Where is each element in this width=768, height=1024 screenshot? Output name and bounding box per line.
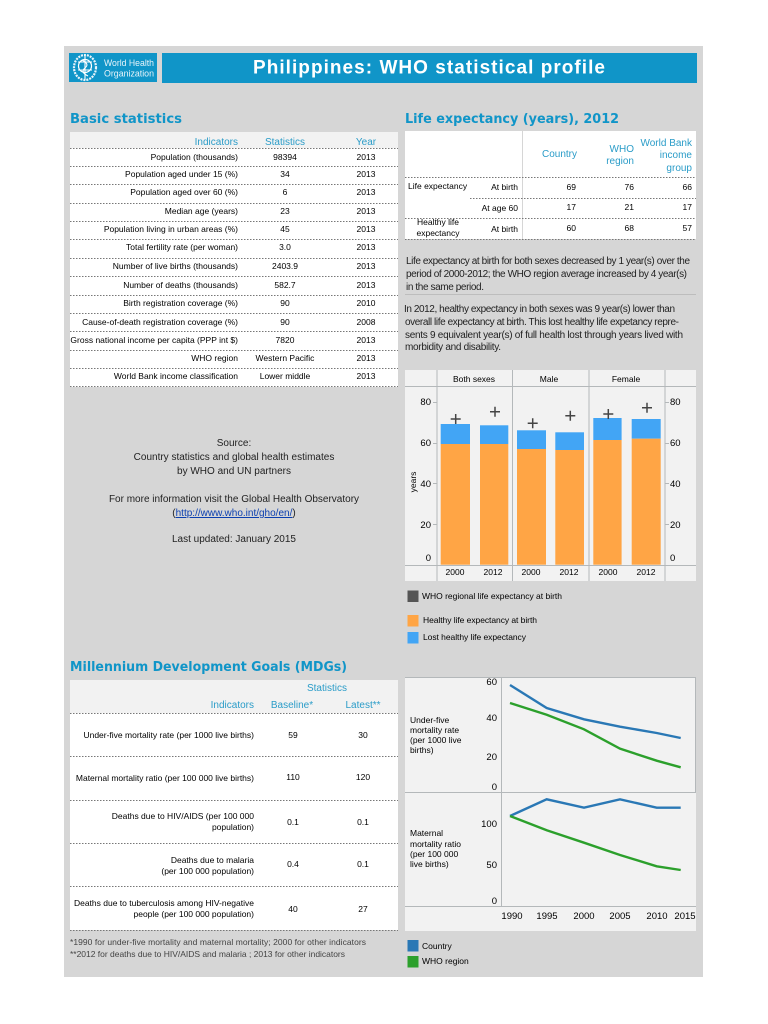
- bar chart: life expectancy: 2012: [560, 567, 579, 577]
- table: MDGs: Baseline*: [271, 700, 313, 711]
- table: MDGs: (per 100 000 population): [161, 866, 254, 876]
- bar chart: life expectancy: 60: [420, 438, 431, 449]
- line charts: mortality trends: 1990: [501, 911, 523, 922]
- bar chart: life expectancy: 2012: [637, 567, 656, 577]
- table: MDGs: Deaths due to malaria: [171, 855, 254, 865]
- table: life expectancy: 21: [625, 202, 634, 212]
- table: basic statistics: 582.7: [274, 280, 296, 290]
- chart: under-five mortality: 40: [486, 713, 497, 724]
- table: life expectancy: 66: [683, 182, 692, 192]
- table: life expectancy: income: [660, 150, 692, 161]
- bar chart: life expectancy: 80: [670, 397, 681, 408]
- table: basic statistics: 2013: [357, 353, 376, 363]
- table: life expectancy: 60: [567, 223, 576, 233]
- source note: by WHO and UN partners: [177, 466, 291, 477]
- title banner: [162, 53, 697, 83]
- table: MDGs: [70, 680, 398, 930]
- legend: line charts: WHO region: [422, 956, 469, 966]
- table: basic statistics: Population aged over 60 (%): [130, 187, 238, 197]
- bar chart: life expectancy: 60: [670, 438, 681, 449]
- line charts: mortality trends: [405, 677, 696, 931]
- table: MDGs: Under-five mortality rate (per 1000 live births): [83, 730, 254, 740]
- source note: Last updated: January 2015: [172, 534, 296, 545]
- bar chart: life expectancy: 80: [420, 397, 431, 408]
- table: basic statistics: Population living in urban areas (%): [104, 224, 238, 234]
- table: basic statistics: World Bank income classification: [114, 371, 238, 381]
- table: life expectancy: At age 60: [482, 203, 518, 213]
- line charts: mortality trends: 2015: [674, 911, 696, 922]
- chart: under-five mortality: 0: [492, 782, 497, 793]
- text: healthy expectancy: In 2012, healthy expectancy in both sexes was 9 year(s) lower than: [404, 304, 675, 315]
- chart: under-five mortality: 60: [486, 677, 497, 688]
- table: MDGs: Indicators: [211, 700, 254, 711]
- text: healthy expectancy: overall life expectancy at birth. This lost healthy life expetancy repre-: [405, 317, 679, 328]
- table: basic statistics: 2010: [357, 298, 376, 308]
- line charts: mortality trends: 2005: [609, 911, 631, 922]
- table: basic statistics: Cause-of-death registration coverage (%): [82, 317, 238, 327]
- table: basic statistics: 90: [280, 317, 290, 327]
- bar chart: life expectancy: [405, 370, 696, 581]
- text: healthy expectancy: morbidity and disability.: [405, 342, 501, 353]
- table: life expectancy: 17: [567, 202, 576, 212]
- line charts: mortality trends: 1995: [536, 911, 558, 922]
- text: healthy expectancy: sents 9 equivalent year(s) of full health lost through years lived with: [405, 330, 683, 341]
- source note: (http://www.who.int/gho/en/): [172, 508, 296, 519]
- bar chart: life expectancy: 20: [420, 520, 431, 531]
- table: MDGs: 40: [288, 904, 298, 914]
- chart: under-five mortality: mortality rate: [410, 725, 459, 735]
- table: basic statistics: 3.0: [279, 242, 291, 252]
- table: life expectancy: 76: [625, 182, 634, 192]
- table: life expectancy: At birth: [491, 182, 518, 192]
- table: basic statistics: 2013: [357, 224, 376, 234]
- table: basic statistics: Birth registration coverage (%): [123, 298, 238, 308]
- source note: [109, 438, 359, 545]
- heading: basic statistics: Basic statistics: [70, 111, 182, 127]
- table: basic statistics: 2013: [357, 152, 376, 162]
- table: life expectancy: group: [666, 163, 692, 174]
- table: life expectancy: 57: [683, 223, 692, 233]
- table: life expectancy: expectancy: [416, 228, 460, 238]
- table: basic statistics: 7820: [276, 335, 295, 345]
- table: basic statistics: 90: [280, 298, 290, 308]
- text: life expectancy trend: period of 2000-2012; the WHO region average increased by 4 year(s): [406, 269, 687, 280]
- table: life expectancy: 17: [683, 202, 692, 212]
- WHO logo: Organization: [104, 68, 154, 80]
- chart: under-five mortality: births): [410, 745, 434, 755]
- bar chart: life expectancy: 20: [670, 520, 681, 531]
- table: basic statistics: Median age (years): [165, 206, 238, 216]
- legend: bar chart: Lost healthy life expectancy: [423, 632, 527, 642]
- legend: bar chart: WHO regional life expectancy at birth: [422, 591, 562, 601]
- table: life expectancy: World Bank: [640, 138, 693, 149]
- table: MDGs: 0.1: [287, 817, 299, 827]
- text: healthy expectancy: [404, 304, 683, 353]
- chart: under-five mortality: Under-five: [410, 715, 449, 725]
- table: basic statistics: [70, 132, 398, 387]
- table: MDGs: Maternal mortality ratio (per 100 000 live births): [76, 773, 254, 783]
- table: MDGs: 0.1: [357, 859, 369, 869]
- chart: maternal mortality: [410, 799, 681, 907]
- table: MDGs: Statistics: [307, 683, 347, 694]
- legend: line charts: Country: [422, 941, 453, 951]
- bar chart: life expectancy: 2012: [484, 567, 503, 577]
- table: basic statistics: 98394: [273, 152, 297, 162]
- bar chart: life expectancy: 2000: [446, 567, 465, 577]
- table: basic statistics: WHO region: [191, 353, 238, 363]
- table: MDGs: 27: [358, 904, 368, 914]
- footnotes: [70, 937, 366, 959]
- table: basic statistics: 2013: [357, 261, 376, 271]
- text: life expectancy trend: [406, 256, 690, 293]
- table: life expectancy: [405, 131, 696, 240]
- table: MDGs: people (per 100 000 population): [133, 909, 254, 919]
- chart: maternal mortality: Maternal: [410, 828, 443, 838]
- line charts: mortality trends: 2010: [646, 911, 668, 922]
- chart: under-five mortality: 20: [486, 752, 497, 763]
- bar chart: life expectancy: 0: [670, 553, 675, 564]
- table: basic statistics: Gross national income per capita (PPP int $): [70, 335, 238, 345]
- table: basic statistics: 2013: [357, 169, 376, 179]
- table: basic statistics: Population (thousands): [151, 152, 238, 162]
- table: MDGs: 0.1: [357, 817, 369, 827]
- table: MDGs: Deaths due to tuberculosis among HIV-negative: [74, 898, 254, 908]
- table: basic statistics: 2403.9: [272, 261, 298, 271]
- table: MDGs: Latest**: [345, 700, 381, 711]
- table: MDGs: 30: [358, 730, 368, 740]
- table: MDGs: Deaths due to HIV/AIDS (per 100 000: [112, 811, 254, 821]
- chart: maternal mortality: 100: [481, 819, 497, 830]
- heading: MDGs: Millennium Development Goals (MDGs): [70, 659, 347, 675]
- text: life expectancy trend: in the same period.: [406, 282, 484, 293]
- table: basic statistics: Statistics: [265, 137, 305, 148]
- legend: line charts: [408, 940, 469, 968]
- heading: life expectancy: Life expectancy (years), 2012: [405, 111, 619, 127]
- table: life expectancy: At birth: [491, 224, 518, 234]
- bar chart: life expectancy: Female: [612, 374, 640, 384]
- table: MDGs: population): [212, 822, 254, 832]
- background panel: [64, 46, 703, 977]
- table: life expectancy: Healthy life: [417, 217, 459, 227]
- source note: Source:: [217, 438, 251, 449]
- table: basic statistics: 6: [283, 187, 288, 197]
- table: life expectancy: region: [606, 156, 634, 167]
- source note: Country statistics and global health estimates: [134, 452, 334, 463]
- bar chart: life expectancy: 40: [420, 479, 431, 490]
- table: life expectancy: Country: [542, 149, 577, 160]
- chart: maternal mortality: (per 100 000: [410, 849, 458, 859]
- footnotes: *1990 for under-five mortality and maternal mortality; 2000 for other indicators: [70, 937, 366, 947]
- table: life expectancy: 68: [625, 223, 634, 233]
- table: basic statistics: 2013: [357, 280, 376, 290]
- table: basic statistics: Number of deaths (thousands): [123, 280, 238, 290]
- WHO logo: World Health: [104, 58, 154, 69]
- table: basic statistics: Population aged under 15 (%): [125, 169, 238, 179]
- table: basic statistics: Total fertility rate (per woman): [126, 242, 238, 252]
- bar chart: life expectancy: Both sexes: [453, 374, 495, 384]
- table: MDGs: 120: [356, 772, 370, 782]
- legend: bar chart: [408, 590, 562, 644]
- bar chart: life expectancy: 40: [670, 479, 681, 490]
- footnotes: **2012 for deaths due to HIV/AIDS and malaria ; 2013 for other indicators: [70, 949, 345, 959]
- line charts: mortality trends: 2000: [573, 911, 595, 922]
- bar chart: life expectancy: 2000: [599, 567, 618, 577]
- chart: under-five mortality: (per 1000 live: [410, 735, 462, 745]
- bar chart: life expectancy: years: [408, 472, 418, 492]
- table: basic statistics: 23: [280, 206, 290, 216]
- text: life expectancy trend: Life expectancy at birth for both sexes decreased by 1 year(s) over the: [406, 256, 690, 267]
- chart: maternal mortality: mortality ratio: [410, 839, 461, 849]
- table: basic statistics: 2013: [357, 206, 376, 216]
- bar chart: life expectancy: 0: [426, 553, 431, 564]
- WHO logo: [69, 53, 157, 82]
- table: basic statistics: 2013: [357, 242, 376, 252]
- table: MDGs: 110: [286, 772, 300, 782]
- table: basic statistics: Indicators: [195, 137, 238, 148]
- source note: For more information visit the Global Health Observatory: [109, 494, 359, 505]
- table: basic statistics: 2008: [357, 317, 376, 327]
- table: life expectancy: WHO: [610, 144, 634, 155]
- table: basic statistics: 2013: [357, 187, 376, 197]
- title banner: Philippines: WHO statistical profile: [253, 58, 605, 78]
- bar chart: life expectancy: Male: [540, 374, 558, 384]
- table: basic statistics: 2013: [357, 335, 376, 345]
- table: life expectancy: Life expectancy: [408, 181, 468, 191]
- table: basic statistics: 45: [280, 224, 290, 234]
- table: basic statistics: Western Pacific: [256, 353, 315, 363]
- chart: under-five mortality: [410, 677, 681, 793]
- table: MDGs: 59: [288, 730, 298, 740]
- table: MDGs: 0.4: [287, 859, 299, 869]
- table: basic statistics: Number of live births (thousands): [113, 261, 238, 271]
- table: life expectancy: 69: [567, 182, 576, 192]
- chart: maternal mortality: live births): [410, 859, 449, 869]
- chart: maternal mortality: 0: [492, 896, 497, 907]
- legend: bar chart: Healthy life expectancy at birth: [423, 615, 537, 625]
- bar chart: life expectancy: 2000: [522, 567, 541, 577]
- table: basic statistics: 34: [280, 169, 290, 179]
- table: basic statistics: Lower middle: [260, 371, 311, 381]
- chart: maternal mortality: 50: [486, 860, 497, 871]
- table: basic statistics: Year: [356, 137, 377, 148]
- table: basic statistics: 2013: [357, 371, 376, 381]
